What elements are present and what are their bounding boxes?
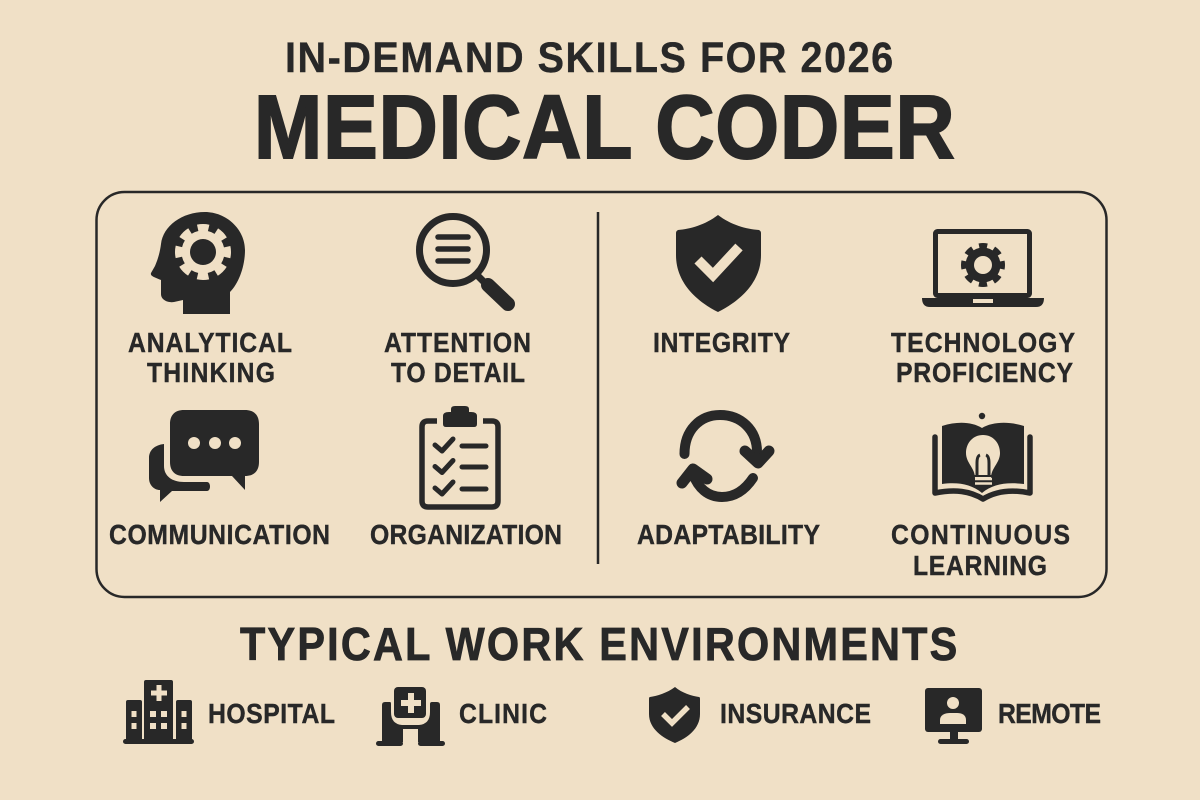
skill: adaptability [637,415,820,550]
label: analytical thinking [128,327,292,388]
environment: remote [925,688,1101,744]
panel: skills [96,192,1106,597]
icon: open book with light bulb [935,413,1030,499]
label: remote: REMOTE [998,698,1101,729]
skill: technology proficiency [891,232,1075,388]
icon: monitor with person [925,688,982,744]
icon: laptop with gear [922,232,1044,307]
label: analytical thinking: THINKING [147,357,275,388]
environment: hospital [123,680,335,744]
icon: insurance shield [649,687,700,743]
icon: chat bubbles [149,410,259,502]
label: clinic: CLINIC [459,698,547,729]
label: continuous learning [891,519,1070,581]
label: technology proficiency: PROFICIENCY [896,357,1074,388]
icon: clipboard checklist [422,406,498,507]
label: attention to detail: TO DETAIL [391,357,525,388]
icon: hospital building [123,680,194,744]
label: insurance: INSURANCE [720,698,871,729]
environment: clinic [376,687,547,746]
title: in-demand skills: IN-DEMAND SKILLS FOR 2026 [285,33,893,81]
label: attention to detail: ATTENTION [384,327,531,358]
label: adaptability: ADAPTABILITY [637,519,820,550]
icon: head with gear [151,212,245,314]
heading: typical work environments: TYPICAL WORK ENVIRONMENTS [240,619,957,671]
label: integrity: INTEGRITY [653,327,790,358]
label: organization: ORGANIZATION [370,519,562,550]
skill: integrity [653,215,790,358]
title: medical coder: MEDICAL CODER [254,77,955,178]
icon: shield with check [676,215,761,312]
label: attention to detail [384,327,531,388]
icon: clinic building [376,687,445,746]
label: analytical thinking: ANALYTICAL [128,327,292,358]
label: technology proficiency: TECHNOLOGY [891,327,1075,358]
label: continuous learning: LEARNING [913,550,1047,581]
skill: organization [370,406,562,550]
skill: attention to detail [384,216,531,388]
label: continuous learning: CONTINUOUS [891,519,1070,550]
icon: cycle arrows [682,415,769,497]
skill: analytical thinking [128,212,292,388]
icon: magnifying glass [420,216,508,304]
label: hospital: HOSPITAL [208,698,335,729]
label: technology proficiency [891,327,1075,388]
skill: continuous learning [891,413,1070,581]
label: communication: COMMUNICATION [109,519,330,550]
skill: communication [109,410,330,550]
environment: insurance [649,687,871,743]
